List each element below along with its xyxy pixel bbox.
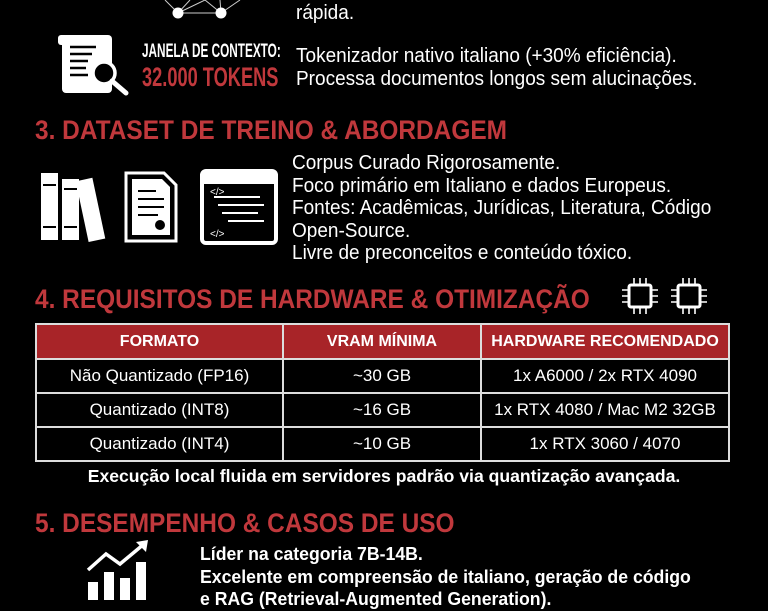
icon: scroll with magnifier — [58, 35, 128, 96]
text: dataset: Foco primário em Italiano e dados Europeus. — [292, 174, 671, 196]
heading 3: 3. DATASET DE TREINO & ABORDAGEM — [35, 115, 507, 145]
table: hardware: 1x RTX 4080 / Mac M2 32GB — [494, 400, 716, 419]
table: hardware — [35, 323, 730, 462]
text: performance: Líder na categoria 7B-14B. — [200, 543, 423, 564]
text: tokenizer — [296, 45, 697, 90]
icons: chips — [622, 278, 707, 314]
table: hardware: ~16 GB — [353, 400, 411, 419]
table: hardware: Quantizado (INT8) — [90, 400, 229, 419]
label: context window — [142, 41, 281, 92]
text: dataset: Livre de preconceitos e conteúdo tóxico. — [292, 242, 632, 264]
text: tokenizer: Processa documentos longos sem alucinações. — [296, 68, 697, 90]
table: hardware: 1x A6000 / 2x RTX 4090 — [513, 366, 697, 385]
table: hardware: VRAM MÍNIMA — [327, 332, 437, 350]
table: hardware: Quantizado (INT4) — [90, 434, 229, 453]
icon: growth chart — [86, 540, 148, 600]
icon: network — [164, 0, 240, 18]
icons: dataset — [41, 169, 278, 245]
table: hardware: Não Quantizado (FP16) — [70, 366, 249, 385]
text: dataset: Corpus Curado Rigorosamente. — [292, 152, 560, 174]
label: context window: JANELA DE CONTEXTO: — [142, 41, 281, 62]
heading 5: 5. DESEMPENHO & CASOS DE USO — [35, 508, 455, 538]
table: hardware: HARDWARE RECOMENDADO — [491, 332, 719, 350]
text: tokenizer: Tokenizador nativo italiano (+30% eficiência). — [296, 45, 677, 67]
table: hardware: ~10 GB — [353, 434, 411, 453]
text: dataset — [292, 152, 711, 264]
table: hardware: 1x RTX 3060 / 4070 — [530, 434, 680, 453]
text: top continuation: rápida. — [296, 2, 354, 24]
text: dataset: Fontes: Acadêmicas, Jurídicas, Literatura, Código — [292, 197, 711, 219]
text: performance: e RAG (Retrieval-Augmented Generation). — [200, 588, 551, 609]
icons: dataset: </> — [210, 229, 225, 240]
text: performance: Excelente em compreensão de italiano, geração de código — [200, 566, 691, 586]
icons: dataset: </> — [210, 187, 225, 198]
table: hardware: ~30 GB — [353, 366, 411, 385]
table: hardware: FORMATO — [120, 332, 199, 350]
text: performance — [200, 543, 691, 609]
label: context window: 32.000 TOKENS — [142, 62, 278, 92]
text: dataset: Open-Source. — [292, 220, 410, 242]
heading 4: 4. REQUISITOS DE HARDWARE & OTIMIZAÇÃO — [35, 284, 590, 314]
text: footnote: Execução local fluida em servidores padrão via quantização avançada. — [88, 466, 680, 486]
